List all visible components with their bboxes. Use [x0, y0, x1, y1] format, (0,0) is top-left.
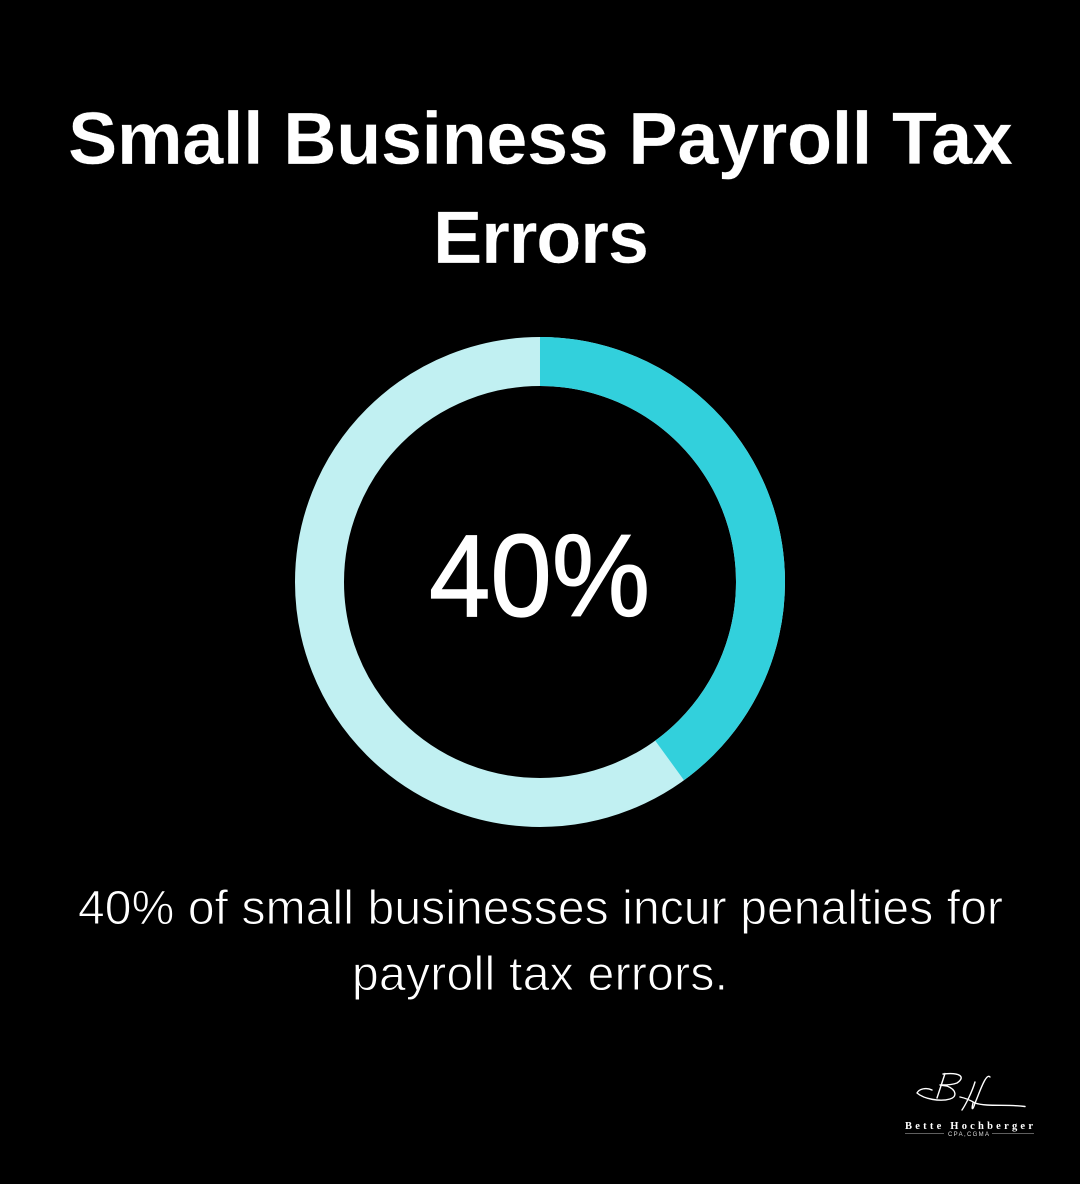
- logo rule left: [905, 1132, 944, 1135]
- logo rule right: [992, 1132, 1034, 1135]
- logo credentials: CPA,CGMA: [948, 1132, 989, 1138]
- description text: 40% of small businesses incur penalties for: [78, 882, 1003, 935]
- donut center value: 40%: [429, 510, 650, 641]
- title: Small Business Payroll Tax: [68, 97, 1013, 180]
- title: [68, 97, 1013, 279]
- donut track: remaining 60%: [320, 362, 760, 802]
- logo: Bette Hochberger signature: [905, 1074, 1034, 1138]
- title: Errors: [433, 196, 649, 279]
- description text: payroll tax errors.: [352, 948, 728, 1001]
- logo signature mark: [917, 1074, 1025, 1110]
- donut segment: 40%: [540, 362, 761, 760]
- logo name: Bette Hochberger: [905, 1121, 1033, 1132]
- donut chart: 40%: [320, 362, 761, 802]
- description text: [78, 882, 1003, 1001]
